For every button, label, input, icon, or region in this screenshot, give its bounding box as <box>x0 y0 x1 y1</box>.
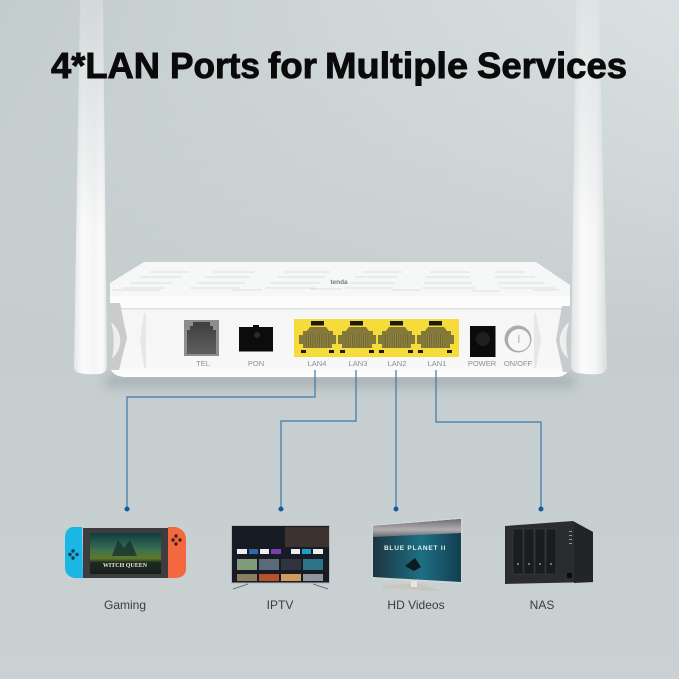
POWER port <box>468 326 497 368</box>
TEL port <box>184 320 219 368</box>
title: for <box>268 45 317 86</box>
title <box>51 45 627 86</box>
right hinge <box>534 306 570 372</box>
ON/OFF button: ON/OFF <box>504 359 533 368</box>
label: HD Videos: HD Videos <box>387 598 445 612</box>
router top with vents: tenda <box>330 279 348 286</box>
right antenna <box>571 0 607 374</box>
router top with vents <box>110 262 570 309</box>
LAN labels: LAN1 <box>428 359 446 368</box>
router body <box>110 262 570 377</box>
LAN labels: LAN2 <box>388 359 406 368</box>
icon: HD TV: BLUE PLANET II <box>384 545 446 552</box>
router front face <box>110 308 570 377</box>
label: NAS: NAS <box>530 598 554 612</box>
connector: LAN1 to NAS <box>436 370 544 512</box>
router shadow <box>105 374 575 388</box>
connector: LAN2 to HD Videos <box>394 370 398 512</box>
title: Multiple <box>325 45 468 86</box>
PON port: PON <box>248 359 264 368</box>
icon: game console <box>65 527 186 578</box>
label: Gaming: Gaming <box>104 598 146 612</box>
ON/OFF button <box>504 326 533 368</box>
LAN labels: LAN4 <box>308 359 326 368</box>
LAN2 port <box>378 321 415 353</box>
LAN ports panel <box>294 319 459 368</box>
LAN3 port <box>338 321 376 353</box>
title: Services <box>477 45 627 86</box>
connector: LAN3 to IPTV <box>278 370 356 512</box>
title: Ports <box>170 45 260 86</box>
left antenna <box>74 0 107 374</box>
title: 4*LAN <box>51 45 160 86</box>
icon: smart TV <box>231 525 330 589</box>
connector: LAN4 to Gaming <box>124 370 315 512</box>
icon: game console: WITCH QUEEN <box>103 563 148 569</box>
LAN labels <box>308 359 446 368</box>
POWER port: POWER <box>468 359 497 368</box>
TEL port: TEL <box>196 359 210 368</box>
label: IPTV: IPTV <box>267 598 293 612</box>
PON port <box>239 325 273 368</box>
icon: HD TV <box>372 518 462 591</box>
LAN labels: LAN3 <box>349 359 367 368</box>
left hinge <box>110 303 146 370</box>
icon: NAS <box>505 521 593 584</box>
LAN1 port <box>417 321 454 353</box>
LAN4 port <box>299 321 336 353</box>
